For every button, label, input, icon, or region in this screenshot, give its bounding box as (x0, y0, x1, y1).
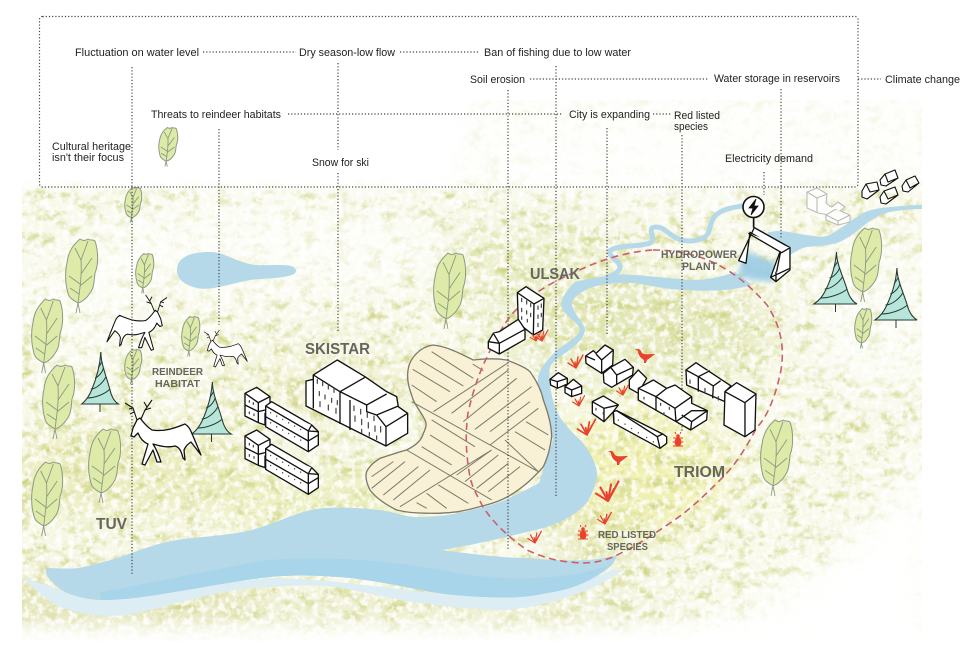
agricultural field (366, 345, 552, 513)
conflict issue labels: Ban of fishing due to low water (484, 47, 631, 59)
dormitory blocks (245, 387, 318, 494)
red birds (608, 349, 655, 465)
hydropower plant (738, 196, 790, 282)
red listed species icons (528, 330, 684, 543)
terrace (686, 363, 731, 402)
waterfall (738, 250, 780, 282)
conflict issue labels: Soil erosion (470, 74, 525, 86)
Skistar resort buildings (245, 360, 408, 494)
conflict issue labels: Water storage in reservoirs (714, 73, 840, 85)
place labels: REINDEER (152, 366, 203, 378)
central complex (638, 380, 707, 430)
pine trees (82, 252, 917, 442)
place labels: RED LISTED (598, 529, 656, 541)
conflict issue labels: Red listed (674, 110, 720, 122)
dotted conflict network (40, 16, 881, 575)
conflict issue labels (52, 47, 960, 169)
red tufts (528, 330, 629, 543)
distant buildings (807, 188, 850, 225)
place labels: PLANT (682, 261, 717, 273)
main hotel block (306, 360, 408, 446)
conflict issue labels: Threats to reindeer habitats (151, 109, 281, 121)
tower (724, 383, 756, 437)
conflict issue labels: Electricity demand (725, 153, 813, 165)
red dashed Triom boundary (466, 250, 782, 563)
Ulsak buildings (488, 287, 544, 354)
conflict issue labels: Fluctuation on water level (75, 47, 199, 59)
place labels: SKISTAR (305, 341, 370, 358)
electricity icon (743, 196, 764, 218)
small village houses (862, 170, 919, 204)
conflict issue labels: Cultural heritage (52, 141, 131, 153)
Triom town buildings (550, 345, 756, 448)
trees (32, 128, 882, 536)
pond (177, 252, 296, 289)
place labels: SPECIES (607, 541, 648, 553)
conflict issue labels: species (674, 121, 708, 133)
reindeer herd (107, 295, 247, 465)
cottages (550, 345, 647, 397)
place labels: ULSAK (530, 266, 580, 283)
place labels: HYDROPOWER (661, 249, 737, 261)
conflict issue labels: Dry season-low flow (299, 47, 395, 59)
conflict issue labels: Snow for ski (312, 157, 369, 169)
place labels: TRIOM (674, 464, 725, 481)
place labels (96, 249, 737, 553)
conflict issue labels: Climate change (885, 74, 960, 86)
river: main lower channel and upper meander (23, 205, 922, 616)
landscape background (22, 100, 922, 640)
long block (592, 396, 667, 448)
dam (739, 217, 790, 282)
red beetles (578, 432, 684, 540)
place labels: HABITAT (155, 378, 201, 390)
conflict issue labels: isn't their focus (52, 152, 124, 164)
place labels: TUV (96, 516, 127, 533)
conflict issue labels: City is expanding (569, 109, 650, 121)
